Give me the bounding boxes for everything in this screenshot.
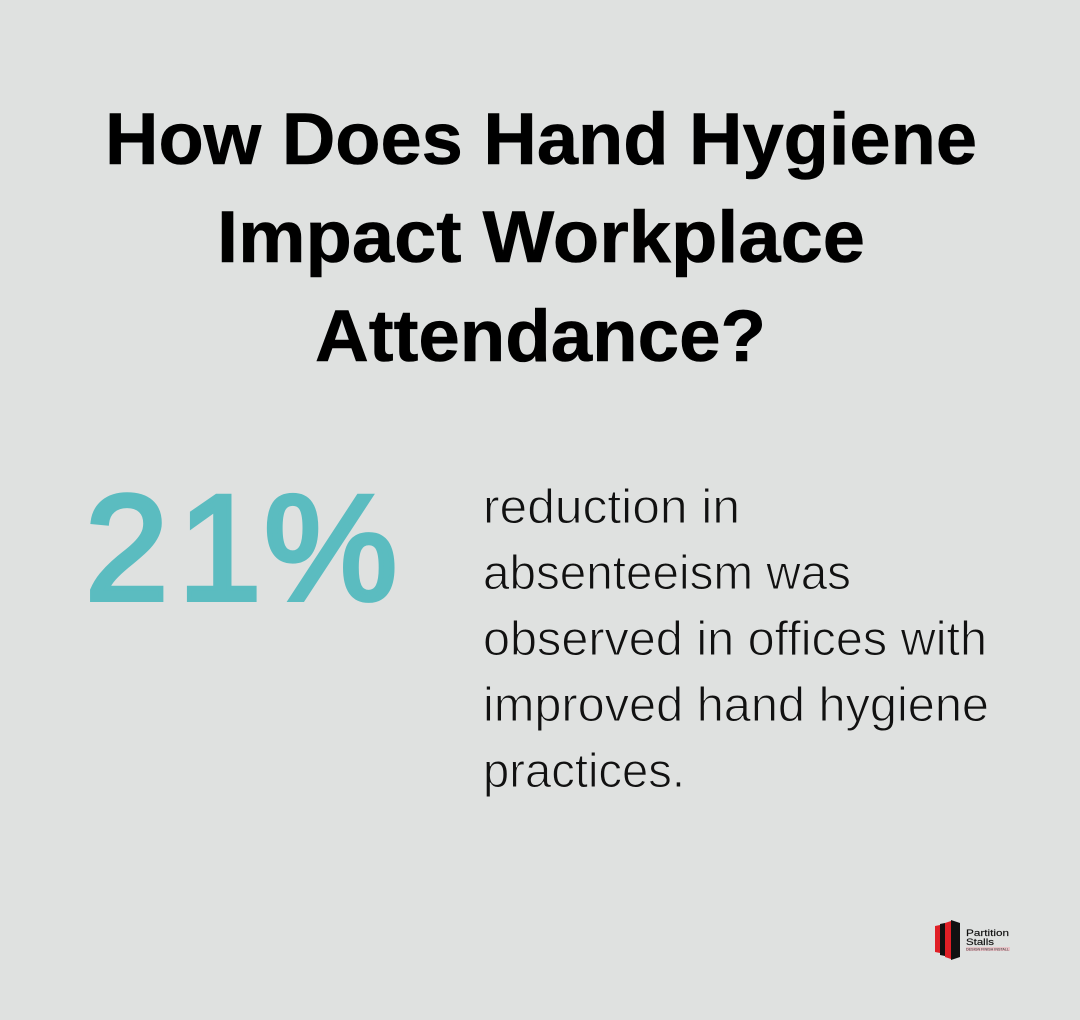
title: How Does Hand Hygiene (105, 99, 977, 180)
description text: practices. (483, 745, 685, 798)
logo: Partition Stalls (935, 920, 1010, 960)
logo wordmark: Stalls (966, 937, 994, 948)
description text: reduction in (483, 481, 740, 534)
title: Impact Workplace (217, 197, 865, 278)
statistic: 21%: 21% (85, 464, 397, 632)
description text: absenteeism was (483, 547, 851, 600)
logo wordmark (966, 928, 1009, 948)
description text: observed in offices with (483, 613, 987, 666)
description text: improved hand hygiene (483, 679, 989, 732)
title (105, 99, 977, 377)
logo tagline strip: DESIGN FINISH INSTALL (966, 948, 1009, 952)
description text (483, 481, 989, 798)
title: Attendance? (315, 296, 766, 377)
icon: partition panels (935, 920, 960, 960)
logo wordmark: Partition (966, 928, 1009, 939)
